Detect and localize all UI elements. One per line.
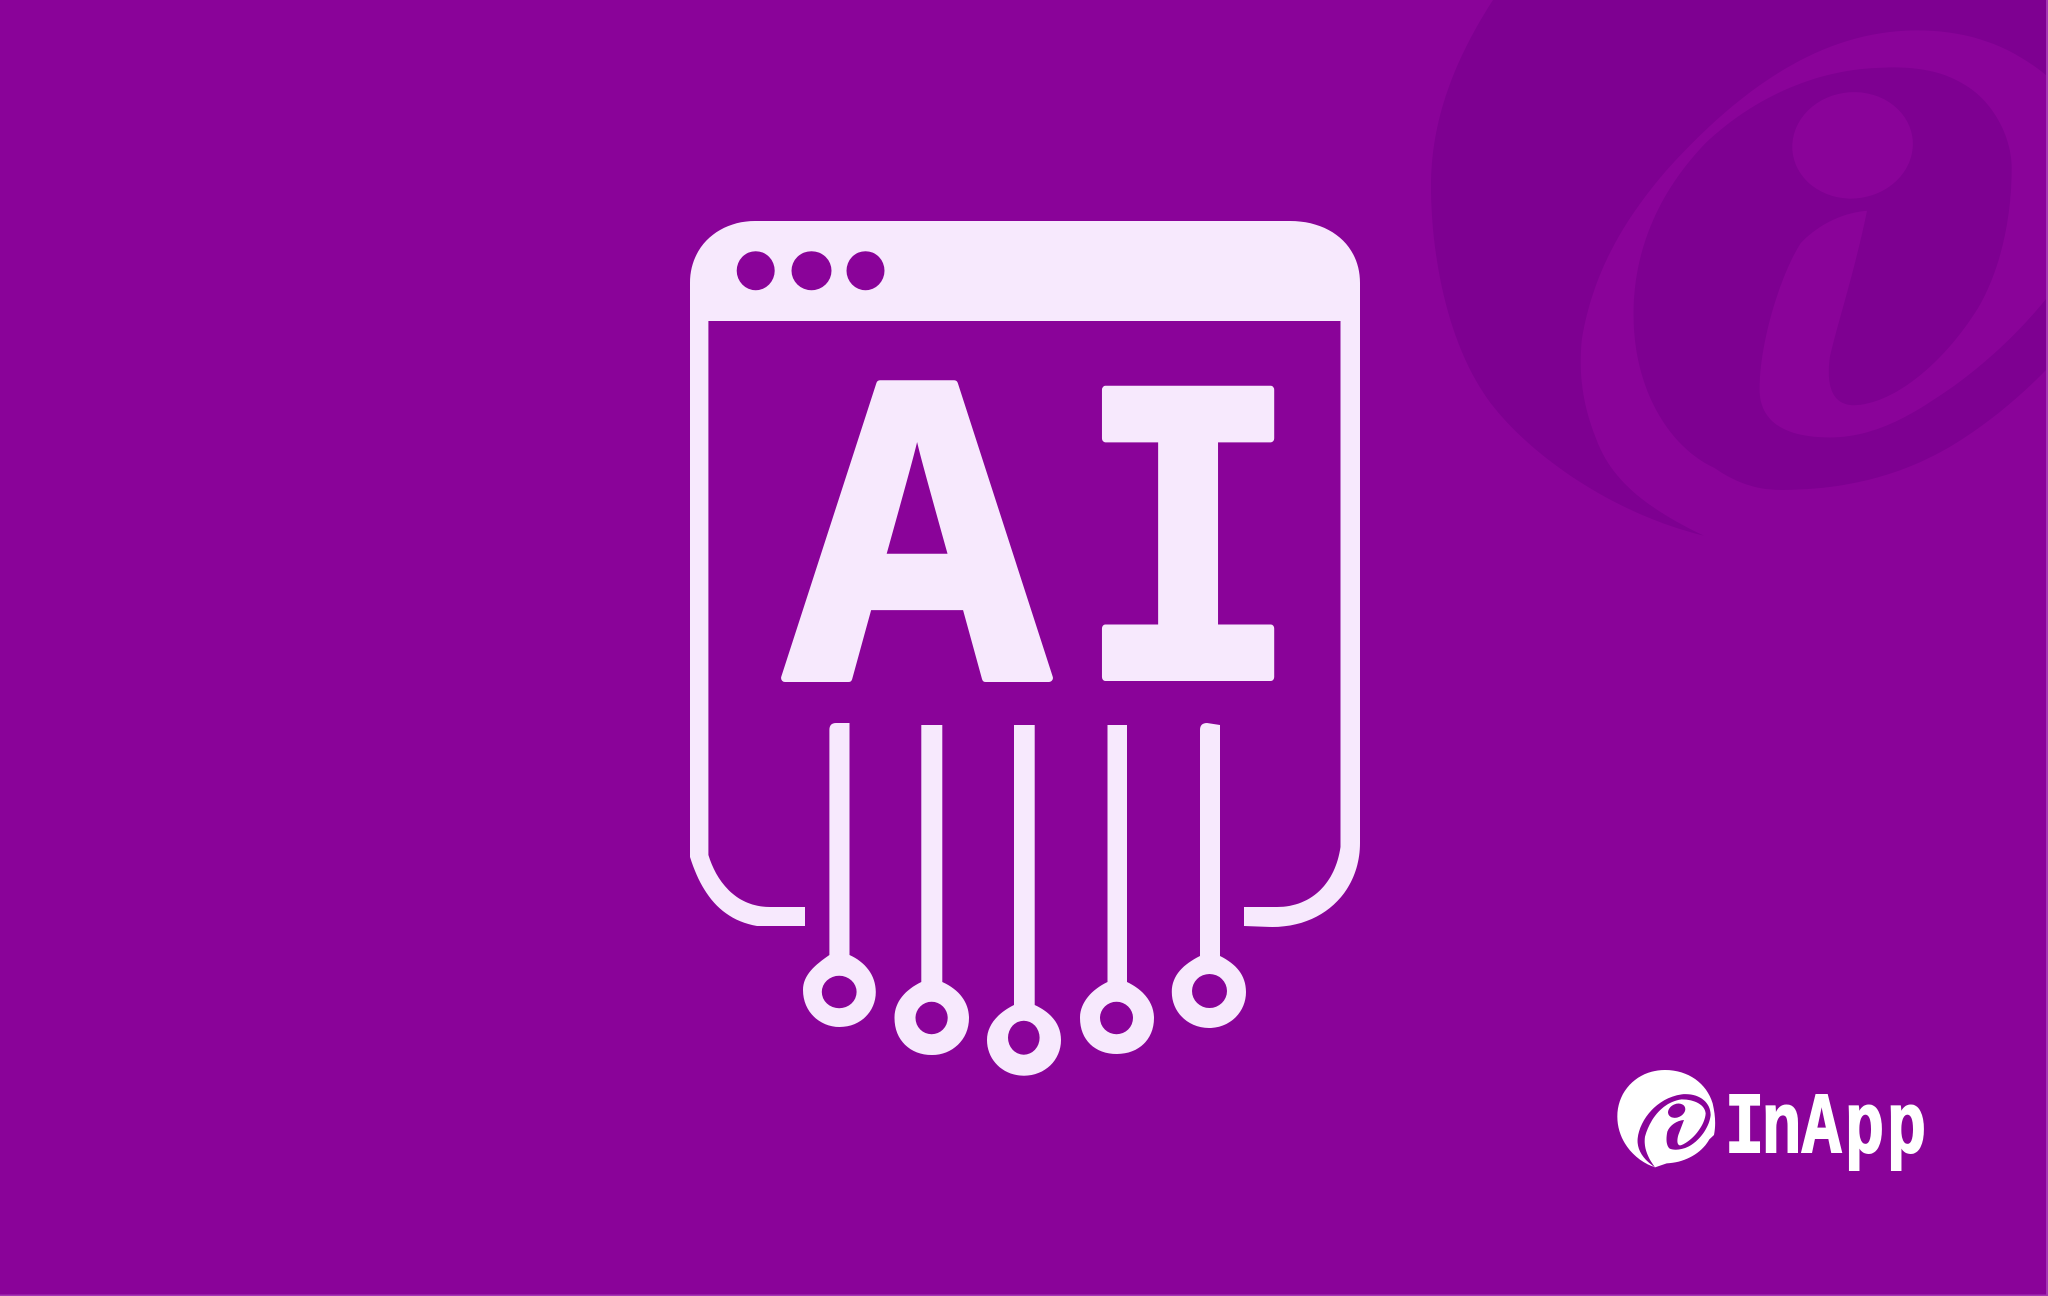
AI lettering: I [1077, 314, 1299, 808]
circuit probe 2 [894, 725, 969, 1055]
AI lettering: A [785, 307, 1053, 812]
circuit probe 1 [803, 723, 876, 1027]
logo mark [1617, 1070, 1715, 1167]
circuit probe 5 [1172, 723, 1246, 1028]
logo: InApp [1617, 1070, 1926, 1178]
browser window frame [690, 221, 1360, 927]
circuit probe 3 [987, 725, 1061, 1076]
icon: AI browser window [690, 221, 1360, 1076]
watermark: InApp i mark [1431, 0, 2048, 536]
logo wordmark: InApp [1725, 1080, 1926, 1178]
window control dots [737, 251, 884, 290]
circuit probe 4 [1080, 725, 1154, 1054]
AI lettering [785, 307, 1299, 812]
